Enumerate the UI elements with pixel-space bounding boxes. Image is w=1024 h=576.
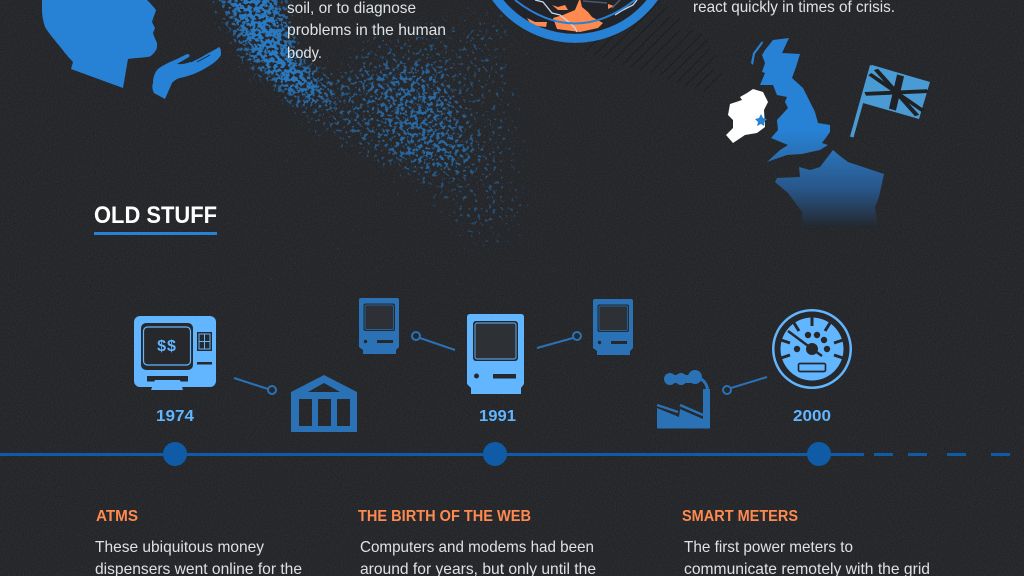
text block: sensors <box>287 0 446 62</box>
icon: flag <box>850 65 930 138</box>
text block: sensors: body. <box>287 45 322 62</box>
lens arc <box>515 0 635 24</box>
entry: birth of the web: THE BIRTH OF THE WEB <box>358 508 531 525</box>
icon: factory <box>657 370 710 428</box>
text block: sensors: problems in the human <box>287 22 446 39</box>
Great Britain <box>760 38 830 162</box>
entry: ATMs: These ubiquitous money <box>95 539 264 556</box>
entry: smart meters: The first power meters to <box>684 539 853 556</box>
map regions <box>527 0 637 32</box>
icon: computer center <box>467 314 524 394</box>
lens ring <box>478 0 672 38</box>
map lens fill <box>477 0 673 39</box>
map: British Isles <box>726 38 884 227</box>
icon: ATM: $$ <box>157 338 177 355</box>
year: 2000: 2000 <box>793 408 831 425</box>
icon: open hand <box>152 47 221 99</box>
connector: ATM to bank <box>234 378 276 394</box>
icon: smart meter <box>772 309 852 389</box>
entry: ATMs: ATMS <box>96 508 138 525</box>
icon: bank <box>291 375 357 432</box>
year: 1974: 1974 <box>156 408 194 425</box>
connector: factory to meter <box>723 377 767 394</box>
year: 1991: 1991 <box>479 408 516 425</box>
icon: computer right <box>593 299 633 355</box>
magnifier map <box>477 0 673 39</box>
France <box>775 150 884 227</box>
text block: sensors: soil, or to diagnose <box>287 0 416 17</box>
hatch shadow <box>585 0 722 91</box>
icon: head blowing <box>42 0 157 88</box>
Hebrides <box>751 41 763 65</box>
star: Dublin <box>755 114 767 126</box>
entry: smart meters <box>682 508 930 576</box>
timeline <box>0 442 1010 466</box>
Ireland <box>726 89 768 143</box>
connector: left computer <box>412 332 455 350</box>
entry: birth of the web: Computers and modems had been <box>360 539 594 556</box>
icon: ATM <box>134 316 216 390</box>
icon: computer left <box>359 298 399 354</box>
entry: smart meters: SMART METERS <box>682 508 798 525</box>
entry: birth of the web <box>358 508 596 576</box>
particle cloud <box>208 0 525 255</box>
heading: old stuff: OLD STUFF <box>94 202 217 229</box>
entry: ATMs <box>95 508 302 576</box>
connector: right computer <box>537 332 581 348</box>
